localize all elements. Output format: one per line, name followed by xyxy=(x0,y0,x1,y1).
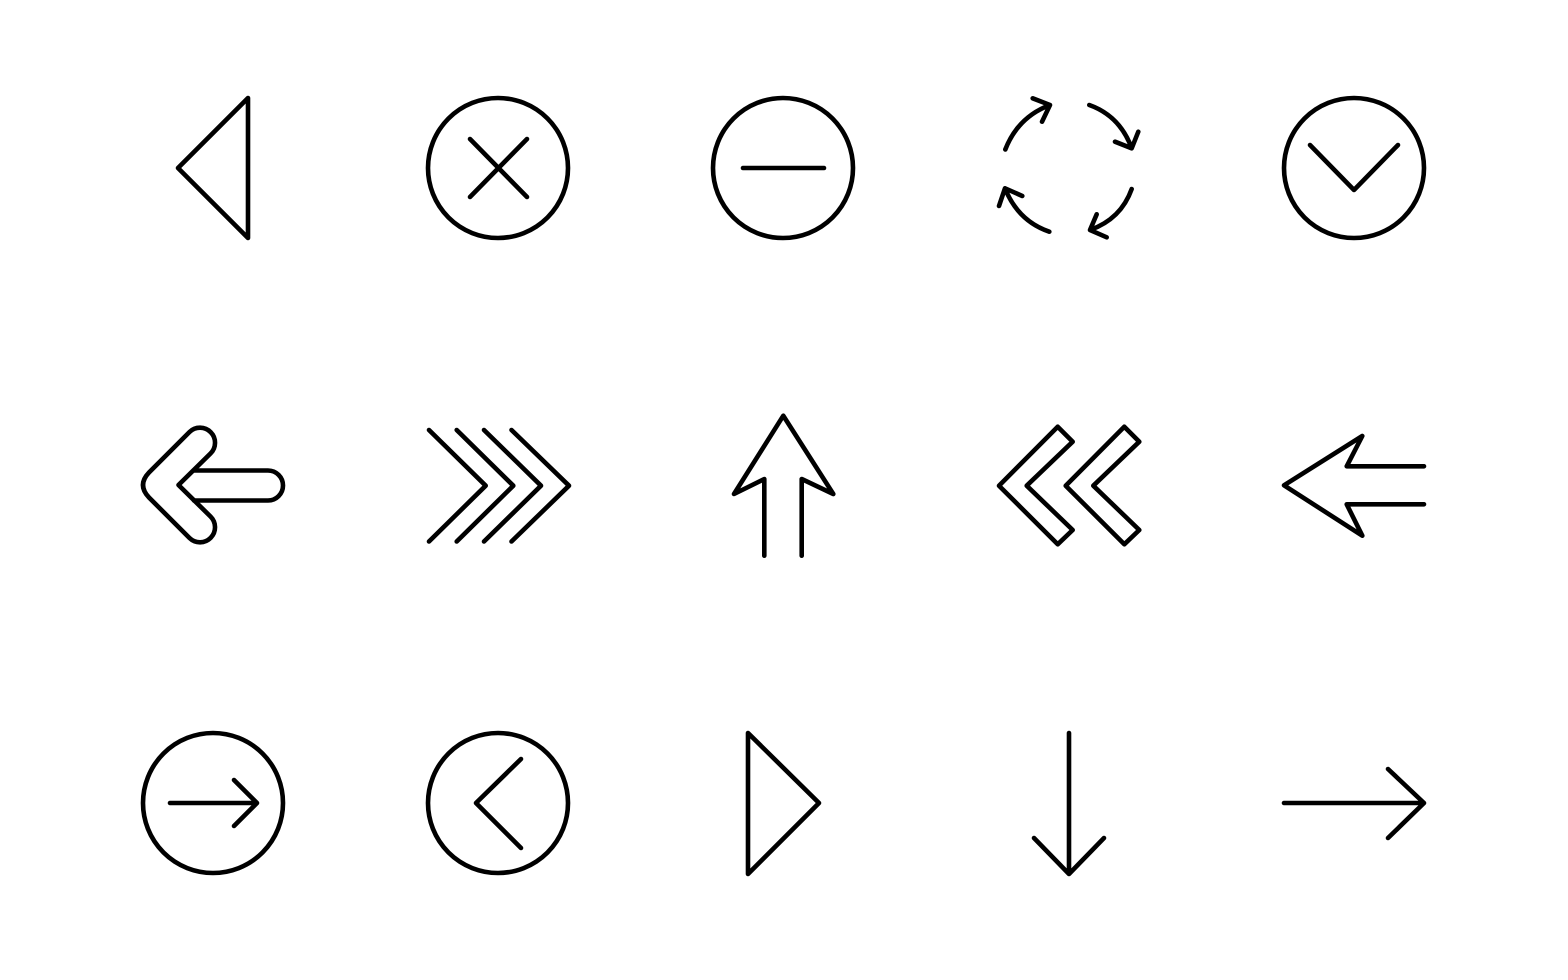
icon: circled minus xyxy=(713,98,853,238)
icon: quadruple right chevrons xyxy=(429,430,569,542)
icon: circled right arrow xyxy=(143,733,283,873)
icon: circled down chevron xyxy=(1284,98,1424,238)
icon: down arrow xyxy=(1034,733,1104,874)
icon: outline double left chevrons xyxy=(999,427,1139,544)
icon: left triangle xyxy=(178,98,248,238)
icon: right arrow xyxy=(1284,769,1424,838)
icon: right triangle xyxy=(748,733,819,874)
icon: circled left chevron xyxy=(428,733,568,873)
icon: rounded outline left arrow xyxy=(143,428,283,542)
icon: outline left arrow with open tail xyxy=(1284,436,1424,536)
icon: circular refresh arrows xyxy=(999,98,1138,237)
icon: outline up arrow xyxy=(734,416,833,556)
icon: circled X xyxy=(428,98,568,238)
